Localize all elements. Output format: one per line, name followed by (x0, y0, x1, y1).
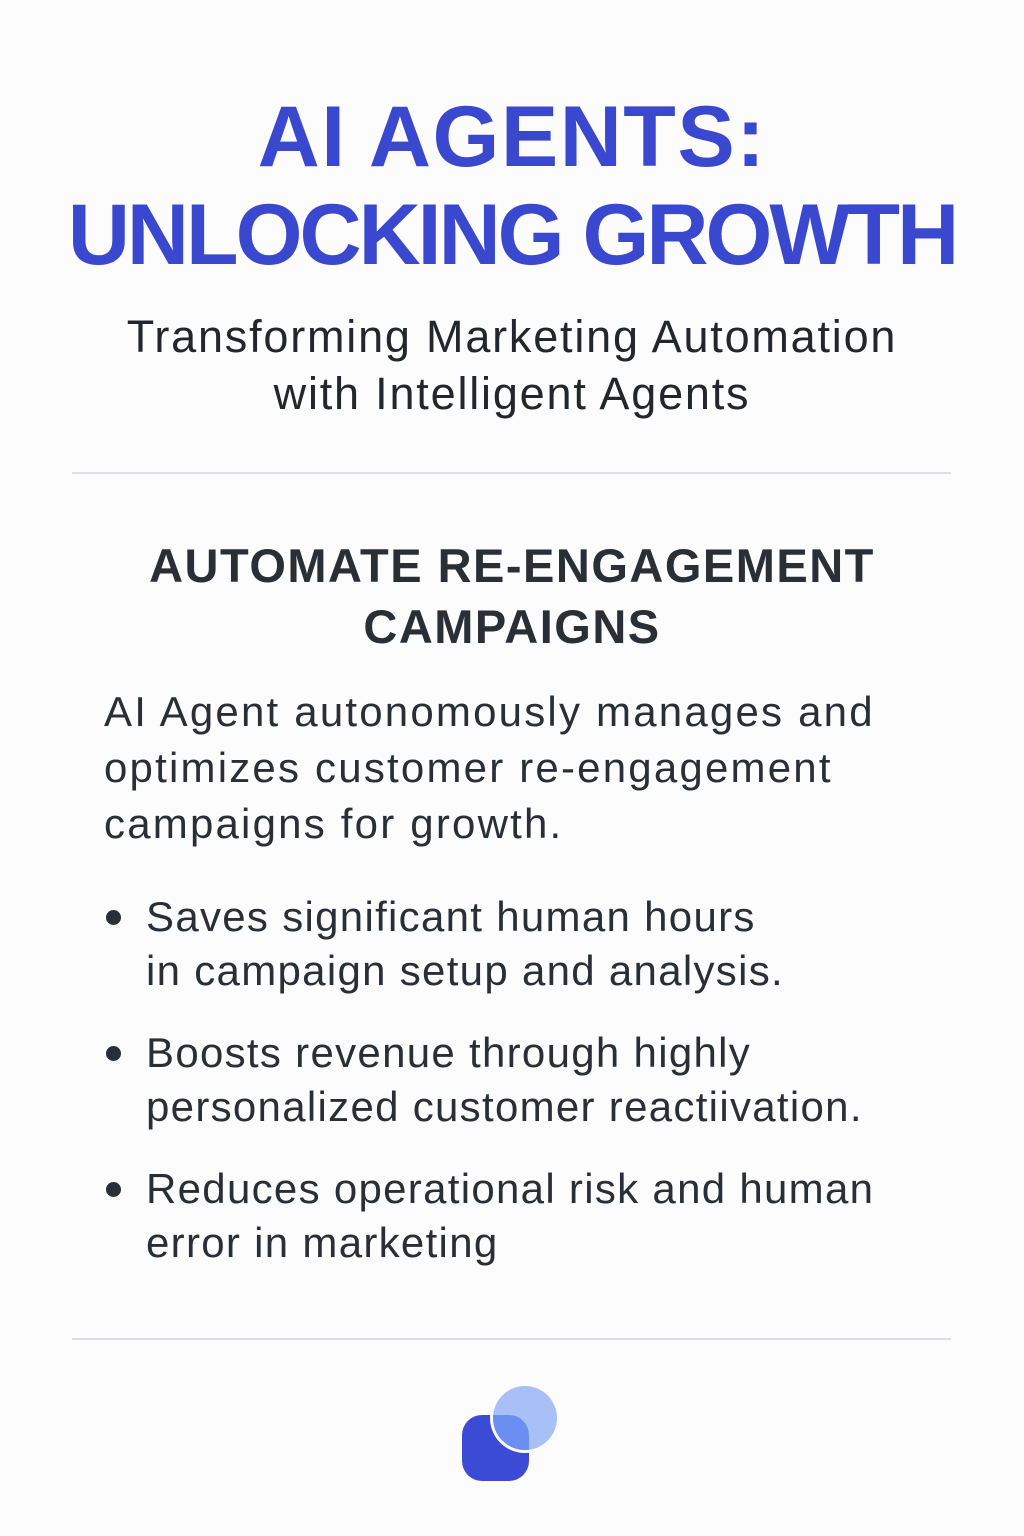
section heading (149, 539, 875, 653)
section heading: AUTOMATE RE-ENGAGEMENT (149, 539, 875, 592)
description text (104, 688, 875, 847)
description text: campaigns for growth. (104, 800, 563, 847)
bullet: saves hours: in campaign setup and analysis. (146, 947, 784, 994)
title (68, 89, 956, 283)
icon: logo (462, 1386, 557, 1481)
bullet: boosts revenue: Boosts revenue through highly (146, 1029, 751, 1076)
title: AI AGENTS: (258, 89, 766, 185)
bullet: reduces risk: error in marketing (146, 1219, 499, 1266)
bullet: saves hours: Saves significant human hours (146, 893, 756, 940)
subtitle: with Intelligent Agents (274, 368, 750, 419)
bullet: boosts revenue: personalized customer reactiivation. (146, 1083, 863, 1130)
bullet: reduces risk: Reduces operational risk and human (146, 1165, 874, 1212)
bullet: reduces risk (106, 1165, 874, 1266)
bullet: saves hours (106, 893, 784, 994)
bullet: boosts revenue (106, 1029, 863, 1130)
section heading: CAMPAIGNS (363, 600, 661, 653)
subtitle: Transforming Marketing Automation (127, 311, 897, 362)
subtitle (127, 311, 897, 419)
description text: optimizes customer re-engagement (104, 744, 833, 791)
title: UNLOCKING GROWTH (68, 187, 956, 283)
description text: AI Agent autonomously manages and (104, 688, 875, 735)
